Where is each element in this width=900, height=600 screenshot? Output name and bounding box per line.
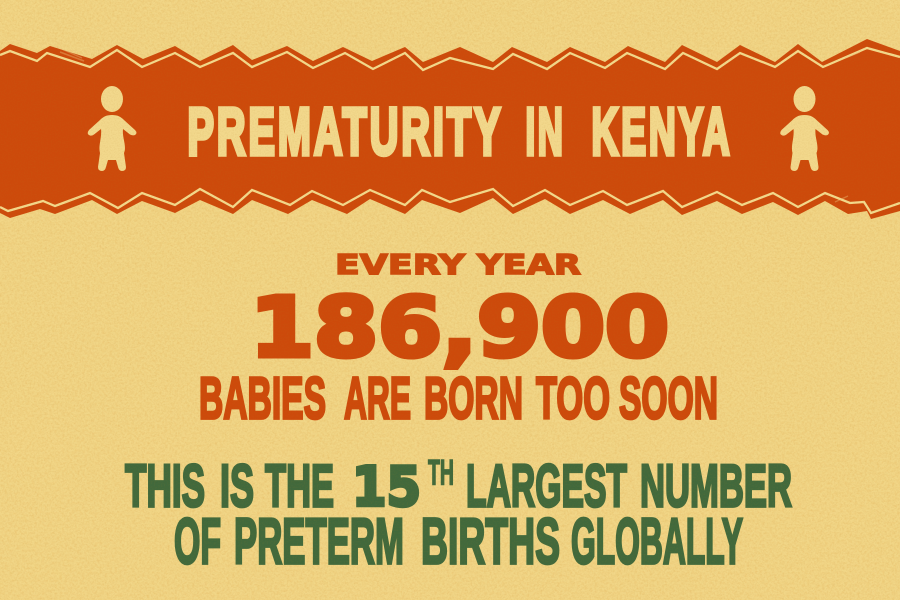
banner bottom zigzag line (0, 189, 900, 213)
text: 15th largest number: 15 (352, 456, 421, 518)
banner top zigzag line (0, 48, 900, 70)
worn paint streaks (55, 46, 860, 203)
text: 15th largest number: NUMBER (640, 452, 792, 520)
banner shape (0, 39, 900, 219)
text: babies are born too soon: BABIES (199, 364, 326, 432)
text: of preterm births globally: BIRTHS (421, 506, 560, 578)
text: 15th largest number: THE (265, 452, 334, 520)
icon: left baby (88, 86, 136, 171)
text: babies are born too soon: TOO (536, 364, 610, 432)
text: of preterm births globally: PRETERM (234, 506, 404, 578)
text: every year: YEAR (476, 248, 581, 281)
text: 15th largest number: THIS (125, 452, 205, 520)
text: babies are born too soon (199, 364, 718, 432)
text: every year: EVERY (335, 248, 466, 281)
text: babies are born too soon: BORN (424, 364, 523, 432)
text: babies are born too soon: ARE (344, 364, 411, 432)
number: 186,900: 186,900 (250, 281, 669, 376)
text: of preterm births globally: OF (174, 506, 221, 578)
text: 15th largest number (125, 452, 792, 520)
text: 15th largest number: TH (428, 454, 454, 492)
banner (0, 39, 900, 219)
title: PREMATURITY (188, 96, 504, 170)
text: 15th largest number: LARGEST (466, 452, 627, 520)
title: IN (526, 96, 566, 170)
title: KENYA (592, 96, 732, 170)
icon: right baby (780, 86, 829, 171)
text: of preterm births globally (174, 506, 743, 578)
text: babies are born too soon: SOON (619, 364, 718, 432)
text: 15th largest number: IS (220, 452, 254, 520)
text: every year (335, 248, 581, 281)
